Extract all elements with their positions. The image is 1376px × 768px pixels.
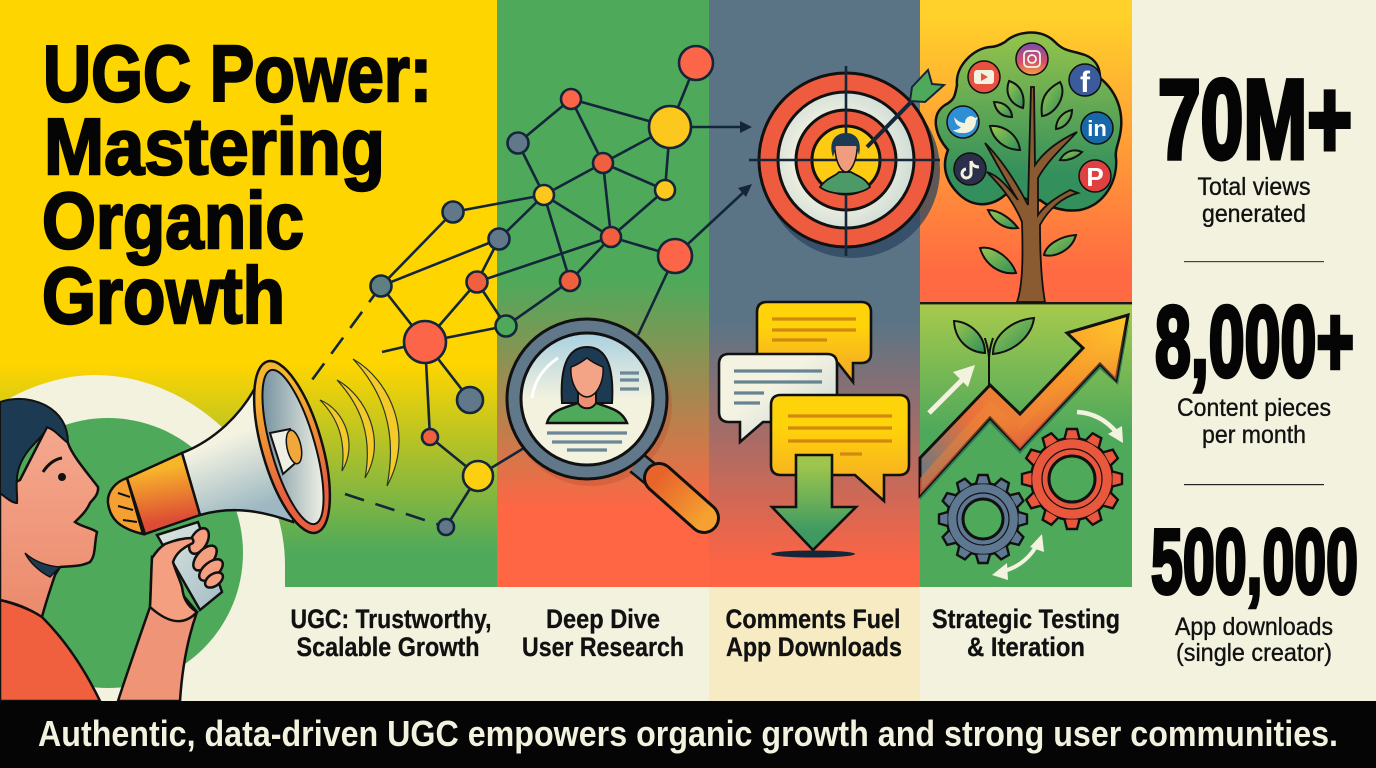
- horn body: [182, 388, 300, 522]
- LinkedIn icon: in: [1087, 116, 1107, 141]
- stat: 8,000+: Content pieces: [1177, 394, 1331, 422]
- eye: [58, 473, 66, 481]
- download arrow: [772, 455, 856, 550]
- Instagram icon: [1016, 43, 1048, 75]
- divider: [1184, 484, 1324, 485]
- icon: sprout, growth arrow and gears: [920, 315, 1130, 580]
- tree leaves: [980, 81, 1082, 273]
- caption: UGC: Scalable Growth: [296, 632, 480, 662]
- forearm: [118, 558, 197, 701]
- caption: UGC: [290, 604, 492, 662]
- red gear: [1022, 429, 1122, 529]
- bell rim: [239, 353, 345, 541]
- profile text lines: [547, 373, 639, 450]
- divider: [1184, 261, 1324, 262]
- bell interior: [250, 364, 336, 530]
- caption: comments: [726, 604, 902, 662]
- hair front: [0, 399, 68, 503]
- caption: testing: & Iteration: [967, 632, 1085, 662]
- double curved arrow: [992, 534, 1044, 580]
- icon: magnifying glass with user profile: [507, 319, 704, 518]
- network graph: [312, 46, 752, 535]
- title: [42, 29, 432, 340]
- sound waves: [320, 359, 399, 486]
- icon: social media tree: [936, 33, 1121, 302]
- caption: comments: Comments Fuel: [726, 604, 900, 634]
- hand gripping handle: [150, 525, 227, 621]
- bottom banner: [0, 701, 1376, 768]
- handle: [157, 522, 222, 610]
- inner driver: [270, 429, 300, 474]
- title: Growth: [42, 251, 285, 340]
- panel: megaphone yellow to green background: [0, 0, 497, 587]
- Facebook icon: [1069, 64, 1101, 99]
- title: Organic: [42, 176, 304, 265]
- caption: UGC: UGC: Trustworthy,: [290, 604, 492, 634]
- illustration: cream and green circles behind speaker: [0, 375, 285, 701]
- eyebrow: [43, 458, 62, 472]
- megaphone: [108, 353, 345, 610]
- panel: comments background: [709, 0, 920, 587]
- user portrait: [547, 347, 627, 423]
- icon: target with user: [749, 66, 944, 258]
- cream growth arrow: [929, 365, 975, 413]
- stat: 500,000: (single creator): [1176, 639, 1332, 667]
- arrows to target: [670, 121, 752, 256]
- target user: [820, 133, 870, 194]
- Twitter icon: [947, 106, 979, 138]
- crown: [936, 33, 1121, 211]
- icon: speech bubbles with download arrow: [719, 302, 909, 558]
- white bubble: [719, 354, 837, 442]
- caption: testing: [932, 604, 1120, 662]
- panel: stats column: [1151, 57, 1358, 667]
- arrow base shadow: [771, 550, 855, 558]
- YouTube icon: [968, 61, 1000, 93]
- stat: 8,000+: per month: [1202, 421, 1306, 449]
- stat: 500,000: App downloads: [1175, 613, 1333, 641]
- social icons: [947, 43, 1113, 192]
- stat: 70M+: [1158, 57, 1352, 228]
- front yellow bubble: [771, 395, 909, 501]
- caption: Deep Dive: [522, 604, 684, 662]
- caption: comments: App Downloads: [726, 632, 902, 662]
- curved cream arrow: [1077, 412, 1123, 443]
- sprout: [954, 318, 1034, 386]
- caption tint: comments: [709, 587, 920, 701]
- stat: 70M+: generated: [1202, 200, 1306, 228]
- caption: Deep Dive: User Research: [522, 632, 684, 662]
- speaker person: [0, 399, 197, 701]
- lens: [521, 333, 653, 465]
- hair back: [0, 520, 50, 600]
- LinkedIn icon: [1081, 112, 1113, 144]
- slate gear: [939, 475, 1027, 563]
- ring: [507, 319, 667, 479]
- jaw shadow: [25, 553, 60, 577]
- panel: testing background: [920, 303, 1132, 587]
- back cap: [108, 478, 143, 534]
- panel: user research background: [497, 0, 709, 587]
- shirt: [0, 600, 100, 701]
- zigzag arrow: [920, 315, 1130, 500]
- yellow to red band: [127, 453, 200, 534]
- stat: 8,000+: [1155, 286, 1354, 449]
- caption: testing: Strategic Testing: [932, 604, 1120, 634]
- Facebook icon: f: [1080, 66, 1091, 99]
- TikTok icon: [954, 153, 986, 185]
- arrow in target: [867, 70, 944, 147]
- panel: tree background: [920, 0, 1132, 303]
- stat: 500,000: [1151, 511, 1358, 667]
- Pinterest icon: P: [1086, 162, 1104, 192]
- face and neck: [0, 427, 98, 617]
- stat: 70M+: Total views: [1198, 173, 1310, 201]
- title: Mastering: [44, 102, 385, 191]
- panel divider line: [920, 302, 1132, 304]
- title: UGC Power:: [43, 29, 432, 118]
- trunk and branches: [985, 87, 1078, 302]
- handle: [637, 463, 704, 518]
- back yellow bubble: [757, 302, 871, 382]
- Pinterest icon: [1079, 160, 1111, 192]
- caption: Deep Dive: Deep Dive: [546, 604, 660, 634]
